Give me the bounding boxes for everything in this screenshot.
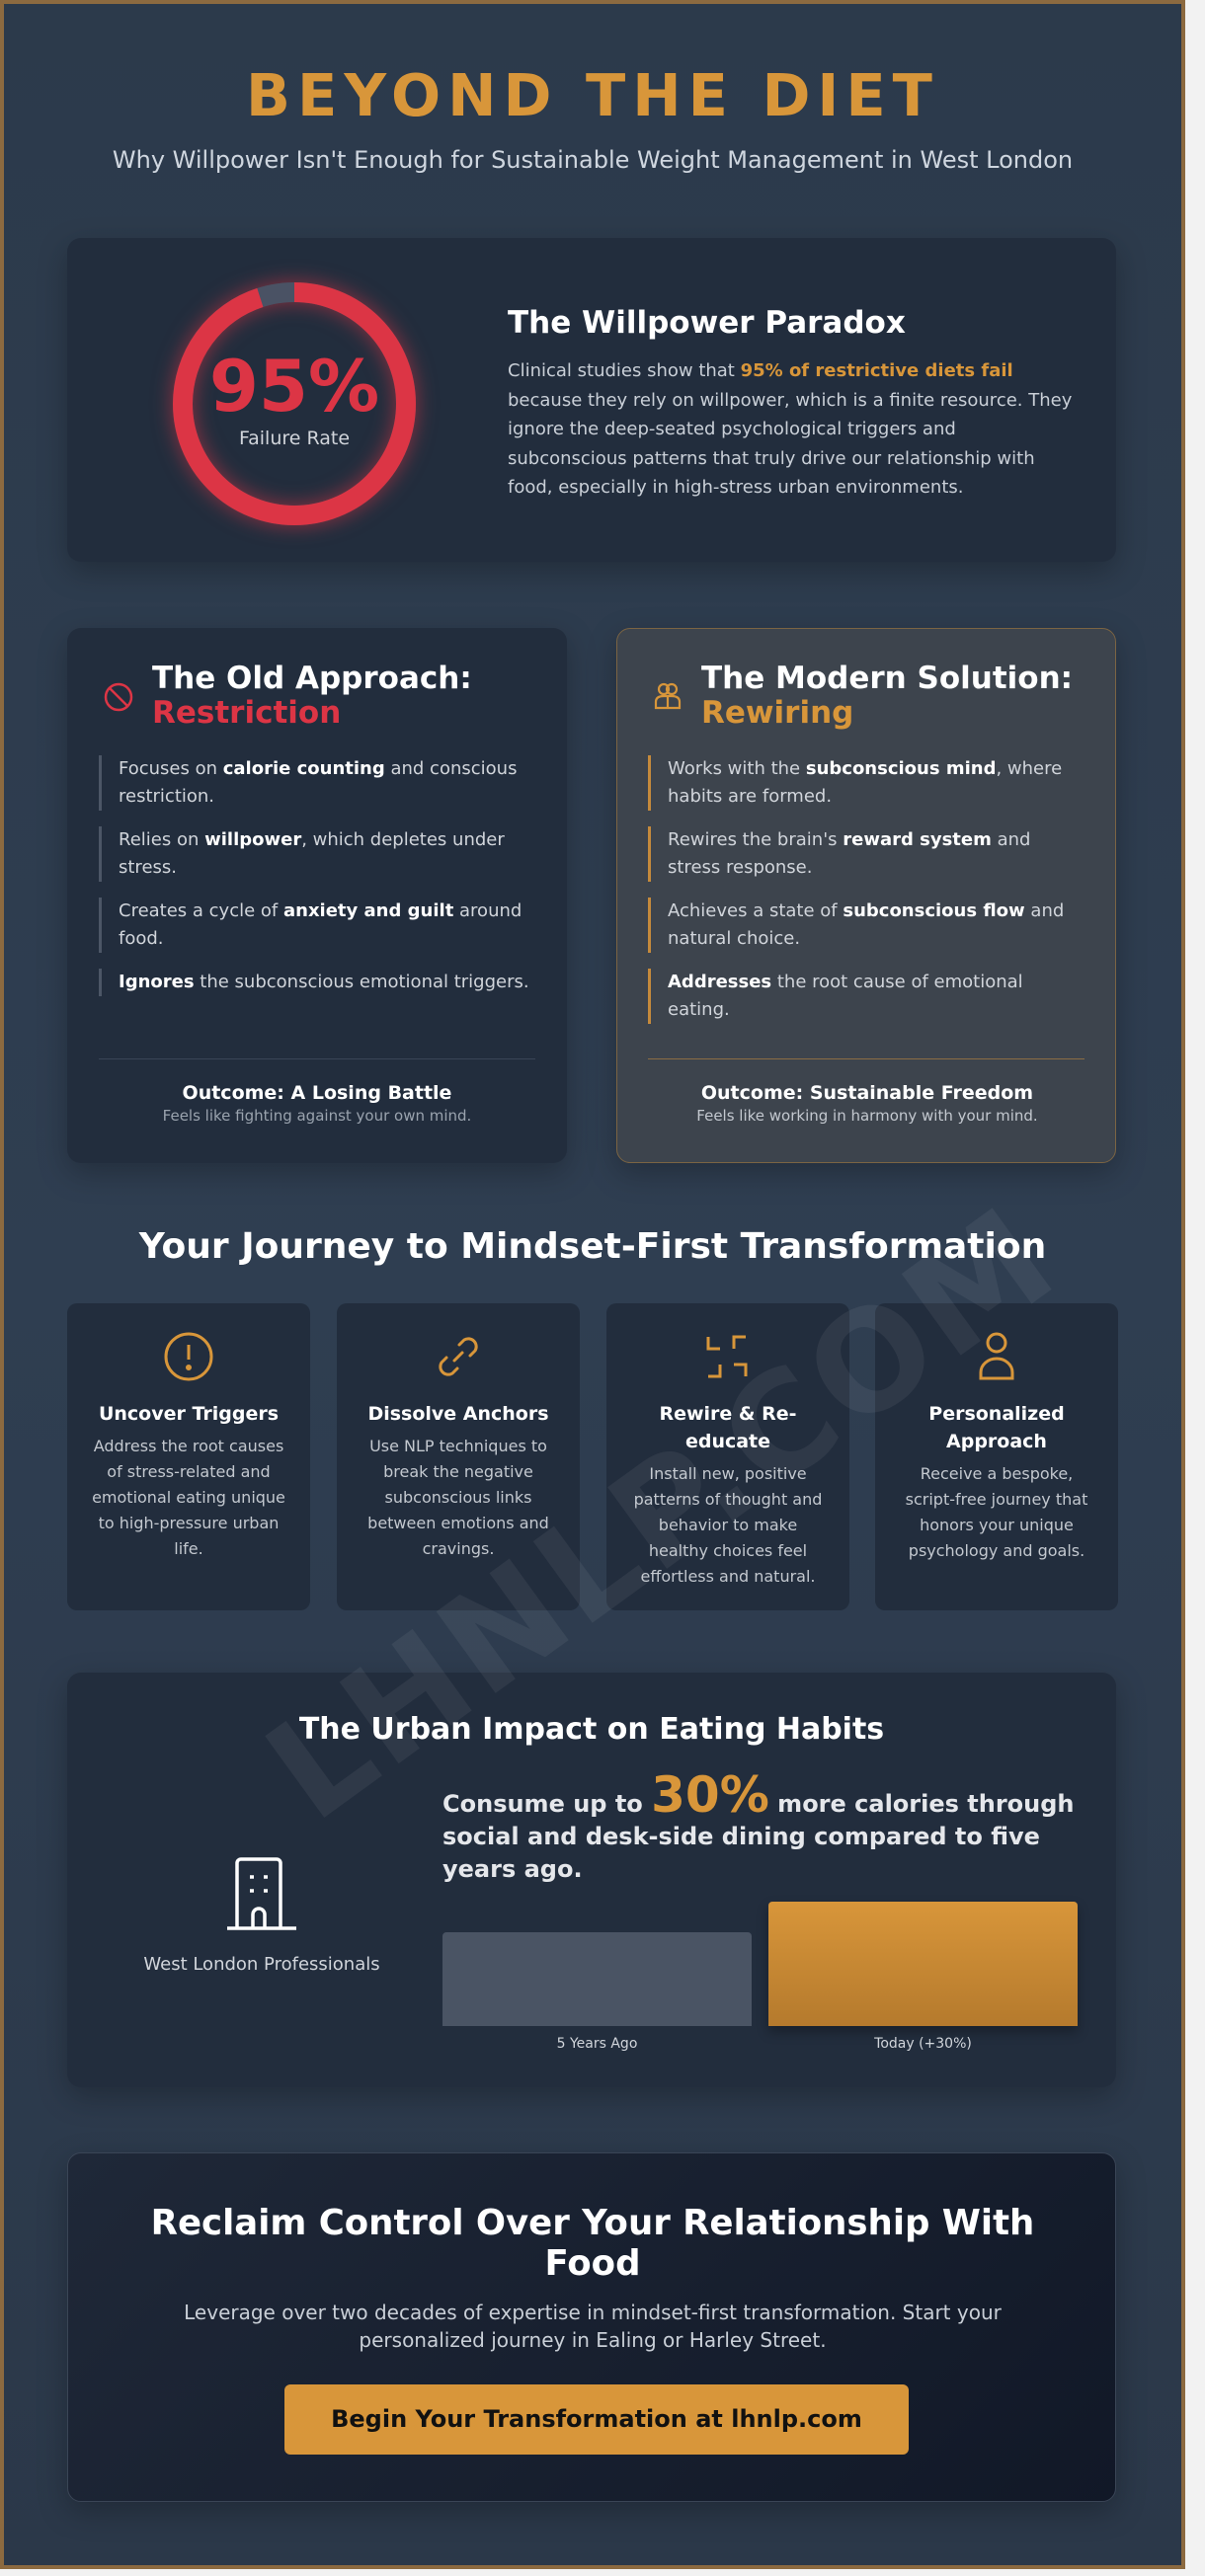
heading: Reclaim Control Over Your Relationship With Food <box>151 2203 1034 2284</box>
heading <box>152 661 472 731</box>
outcome: Feels like fighting against your own mind. <box>163 1107 471 1125</box>
subtitle: Why Willpower Isn't Enough for Sustainable Weight Management in West London <box>113 146 1073 174</box>
heading: The Old Approach: <box>152 661 472 696</box>
step: uncover triggers <box>67 1303 310 1610</box>
bullet list: Works with the subconscious mind, where habits are formed. <box>668 758 1062 807</box>
bullet list: Relies on willpower, which depletes under stress. <box>119 829 505 878</box>
label: West London Professionals <box>143 1954 380 1975</box>
bullet list: Achieves a state of subconscious flow and natural choice. <box>668 900 1064 949</box>
chart: 95% ring: 95% <box>209 345 379 428</box>
panel: modern solution <box>616 628 1116 1163</box>
heading: The Urban Impact on Eating Habits <box>299 1712 884 1747</box>
step: uncover triggers: Address the root causes of stress-related and emotional eating unique to high-pressure urban life. <box>92 1437 285 1558</box>
bullet list <box>648 755 1064 1024</box>
heading: Rewiring <box>701 695 853 731</box>
bullet list: Creates a cycle of anxiety and guilt around food. <box>119 900 522 949</box>
chart: 95% ring <box>160 269 429 539</box>
icon: prohibited <box>105 683 132 711</box>
bar chart: 5 Years Ago <box>557 2036 637 2052</box>
step: dissolve anchors: Use NLP techniques to break the negative subconscious links between emotions and cravings. <box>367 1437 549 1558</box>
step: dissolve anchors <box>337 1303 580 1610</box>
watermark: LHNLP.COM <box>239 1177 1084 1852</box>
bullet list <box>99 755 529 996</box>
heading: journey: Your Journey to Mindset-First Transformation <box>139 1226 1046 1267</box>
text block: Clinical studies show that 95% of restrictive diets fail because they rely on willpower, which is a finite resource. They ignore the deep-seated psychological triggers and subconscious patterns that truly drive our relationship with food, especially in high-stress urban environments. <box>508 360 1072 498</box>
bar chart <box>442 1902 1079 2052</box>
panel: willpower paradox <box>67 238 1116 562</box>
step: rewire <box>606 1303 849 1610</box>
title: BEYOND THE DIET <box>246 61 939 129</box>
step: personalized: Personalized Approach <box>928 1403 1065 1452</box>
outcome <box>163 1082 471 1125</box>
bar chart: Today (+30%) <box>874 2036 972 2052</box>
heading: The Modern Solution: <box>701 661 1073 696</box>
bullet list: Rewires the brain's reward system and stress response. <box>668 829 1030 878</box>
bullet list: Focuses on calorie counting and conscious restriction. <box>119 758 517 807</box>
heading: willpower paradox: The Willpower Paradox <box>508 305 906 341</box>
bullet list: Addresses the root cause of emotional eating. <box>668 972 1023 1020</box>
stat text: Consume up to 30% more calories through social and desk-side dining compared to five years ago. <box>442 1766 1075 1883</box>
icon: building <box>227 1857 296 1930</box>
step: rewire: Install new, positive patterns of thought and behavior to make healthy choices feel effortless and natural. <box>634 1464 822 1586</box>
step: uncover triggers: Uncover Triggers <box>99 1403 279 1425</box>
step: dissolve anchors: Dissolve Anchors <box>367 1403 549 1425</box>
bullet list: Ignores the subconscious emotional triggers. <box>119 972 529 992</box>
chart: 95% ring: Failure Rate <box>239 428 350 449</box>
button: Begin Your Transformation at lhnlp.com <box>331 2405 862 2433</box>
panel: old approach <box>67 628 567 1163</box>
text: Leverage over two decades of expertise in mindset-first transformation. Start your personalized journey in Ealing or Harley Street. <box>184 2301 1002 2352</box>
step: personalized: Receive a bespoke, script-free journey that honors your unique psychology and goals. <box>906 1464 1087 1560</box>
button <box>284 2384 909 2455</box>
outcome: Outcome: A Losing Battle <box>183 1082 451 1104</box>
step: rewire: Rewire & Re-educate <box>659 1403 797 1452</box>
step: personalized <box>875 1303 1118 1610</box>
outcome: Outcome: Sustainable Freedom <box>701 1082 1033 1104</box>
outcome: Feels like working in harmony with your mind. <box>696 1107 1038 1125</box>
icon: people <box>654 683 682 709</box>
panel: call to action <box>67 2152 1116 2502</box>
heading: Restriction <box>152 695 341 731</box>
heading <box>701 661 1073 731</box>
panel: urban impact <box>67 1673 1116 2087</box>
outcome <box>696 1082 1038 1125</box>
